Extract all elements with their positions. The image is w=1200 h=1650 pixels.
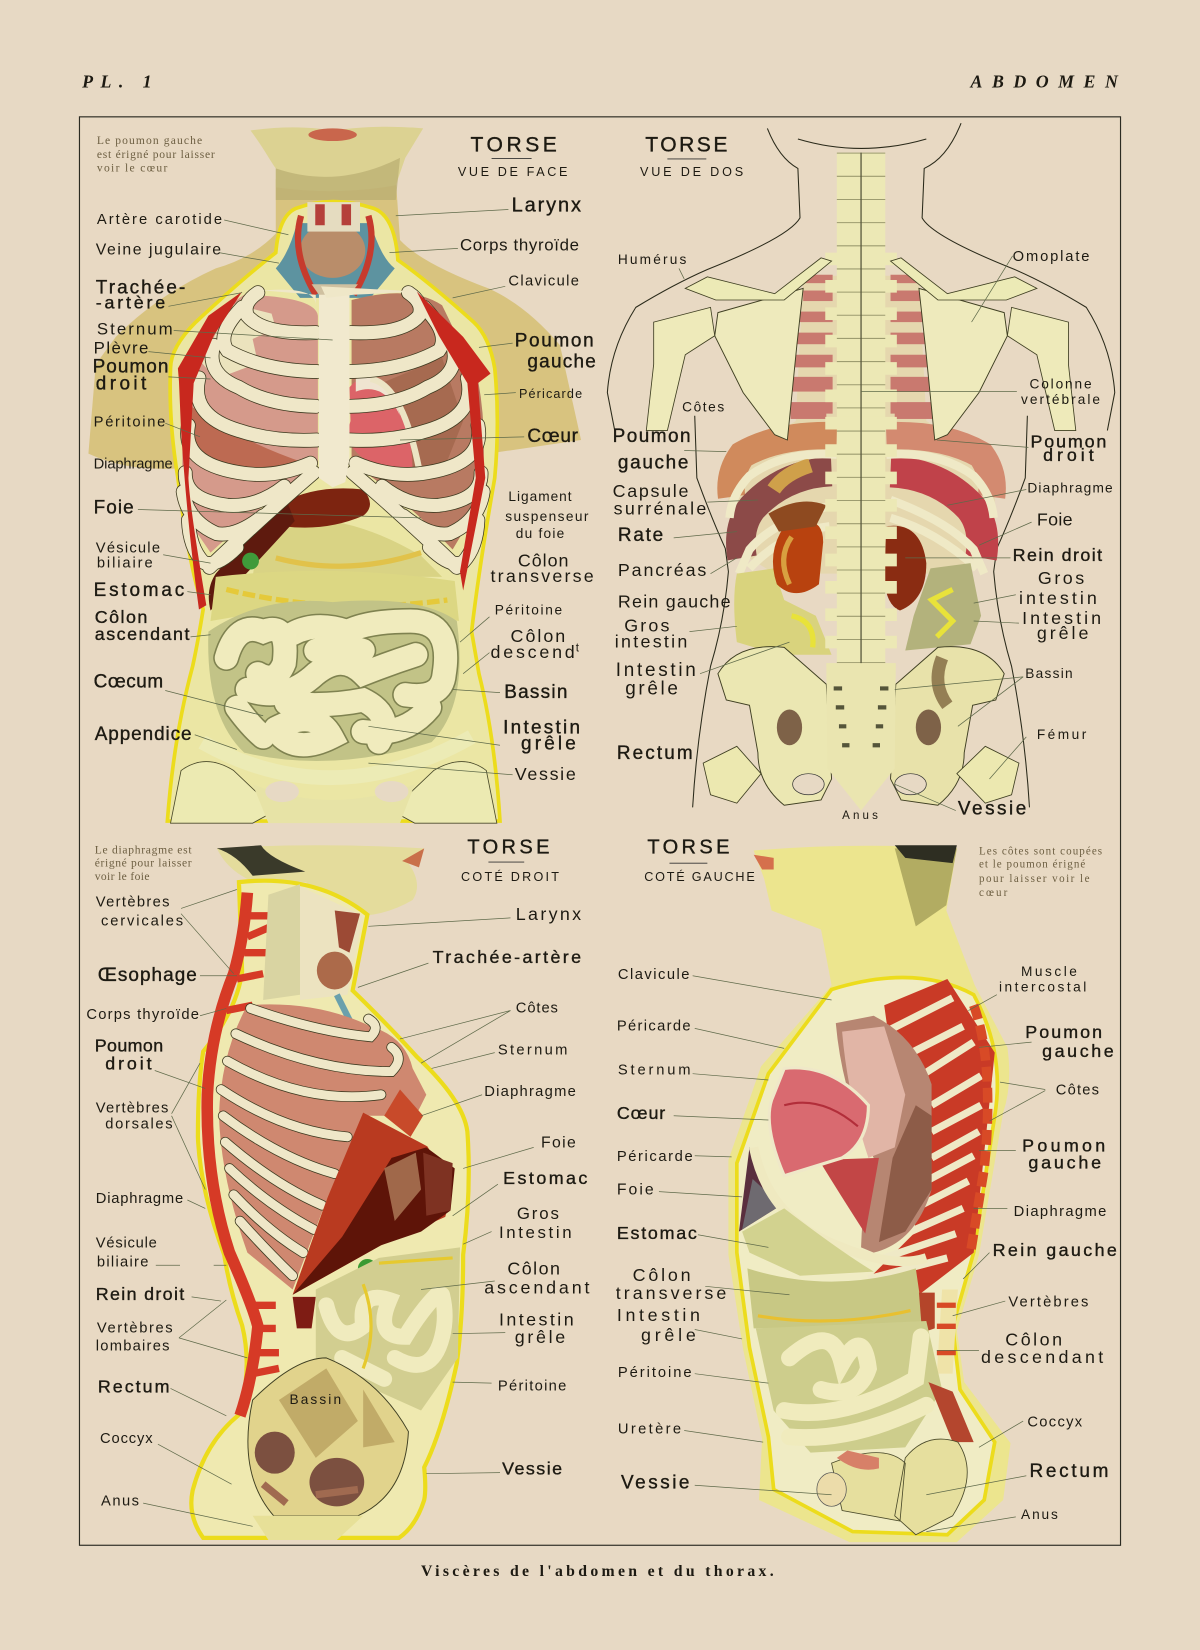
panel: torso right side: [86, 837, 590, 1540]
note: right side: [95, 844, 192, 883]
note: left side: et le poumon érigné: [979, 858, 1085, 870]
labels: right side left column: dorsales: [105, 1116, 173, 1132]
leader lines: [659, 976, 1045, 1532]
labels: left side right column: Coccyx: [1027, 1414, 1083, 1430]
labels: front right: Poumon: [515, 330, 594, 351]
caption: Viscères de l'abdomen et du thorax.: [421, 1563, 774, 1580]
heading: torse coté gauche: TORSE: [647, 837, 729, 859]
labels: back right: intestin: [1019, 588, 1097, 608]
labels: front right: t: [576, 643, 580, 655]
labels: front left: Diaphragme: [94, 456, 173, 472]
labels: front right: descend: [491, 642, 575, 662]
labels: left side left column: Uretère: [618, 1422, 681, 1438]
labels: front left: Artère carotide: [97, 212, 222, 228]
leader lines: [674, 256, 1032, 811]
labels: left side right column: Anus: [1021, 1507, 1058, 1522]
body: [191, 881, 469, 1538]
labels: back right: Gros: [1038, 568, 1084, 588]
intercostal muscles: [863, 979, 995, 1305]
labels: front right: [460, 195, 596, 784]
heading: torse coté droit: [461, 837, 559, 884]
labels: right side left column: Rein droit: [96, 1284, 184, 1304]
labels: right side left column: Vertèbres: [97, 1321, 173, 1337]
heading: torse coté gauche: [644, 837, 755, 884]
diaphragm and liver: [293, 1113, 453, 1295]
labels: back right: Poumon: [1031, 431, 1106, 451]
labels: back left: [613, 252, 1026, 822]
labels: back right: droit: [1043, 445, 1094, 465]
labels: right side left column: lombaires: [96, 1339, 169, 1355]
note: right side: voir le foie: [95, 870, 149, 883]
labels: right side right column: [433, 904, 590, 1479]
liver wedge: [739, 1147, 781, 1232]
kidneys: [773, 521, 823, 593]
heading: torse coté droit: COTÉ DROIT: [461, 869, 559, 884]
labels: right side left column: Vésicule: [96, 1235, 157, 1251]
labels: left side right column: Poumon: [1022, 1136, 1105, 1156]
heading: torse coté gauche: COTÉ GAUCHE: [644, 869, 755, 884]
torso interior: [737, 978, 997, 1535]
labels: right side right column: Intestin: [499, 1223, 572, 1242]
labels: front left: ascendant: [95, 624, 190, 644]
labels: left side right column: Rectum: [1029, 1461, 1108, 1482]
heart: [349, 378, 413, 473]
labels: left side right column: Muscle: [1021, 964, 1077, 979]
labels: front right: Côlon: [518, 550, 568, 570]
labels: front left: Côlon: [95, 607, 147, 627]
labels: front left: -artère: [96, 292, 165, 312]
labels: right side right column: Larynx: [516, 904, 581, 924]
transverse colon: [211, 571, 459, 621]
labels: left side left column: grêle: [641, 1325, 696, 1345]
note: left side: [979, 846, 1102, 899]
labels: right side left column: biliaire: [97, 1254, 148, 1270]
labels: back right: Rein droit: [1013, 545, 1102, 565]
red muscles: [178, 292, 242, 609]
labels: front left: biliaire: [97, 555, 153, 571]
page header right: ABDOMEN: [970, 71, 1119, 91]
labels: front right: Intestin: [503, 718, 580, 739]
labels: front right: gauche: [527, 351, 596, 372]
labels: left side right column: intercostal: [999, 980, 1086, 995]
labels: left side right column: Côlon: [1005, 1329, 1062, 1349]
note: right side: érigné pour laisser: [95, 856, 192, 869]
heading: torse vue de dos: VUE DE DOS: [640, 165, 743, 179]
labels: back right: Omoplate: [1013, 249, 1089, 265]
labels: right side right column: Diaphragme: [484, 1084, 576, 1100]
labels: right side right column: Péritoine: [498, 1379, 566, 1395]
labels: right side left column: Coccyx: [100, 1431, 153, 1447]
labels: left side right column: [981, 964, 1117, 1522]
labels: left side right column: gauche: [1028, 1152, 1101, 1172]
labels: front right: Cœur: [527, 426, 578, 447]
spine: [838, 153, 884, 674]
labels: right side left column: Bassin: [289, 1392, 341, 1407]
diaphragm fan: [819, 1158, 879, 1234]
labels: front right: Vessie: [515, 764, 576, 784]
labels: back right: grêle: [1037, 623, 1088, 643]
labels: right side left column: Vertèbres: [96, 894, 169, 910]
note: right side: Le diaphragme est: [95, 844, 192, 857]
labels: right side right column: Côlon: [507, 1259, 560, 1279]
illustration: right side torso: [191, 845, 469, 1540]
heading: torse vue de face: VUE DE FACE: [458, 165, 567, 179]
labels: left side left column: Cœur: [617, 1103, 665, 1123]
labels: back left: Anus: [842, 810, 878, 822]
labels: right side left column: Anus: [101, 1493, 139, 1509]
labels: front left: Trachée-: [96, 278, 185, 299]
leader lines: [143, 889, 534, 1526]
heading: torse coté droit: TORSE: [467, 837, 549, 859]
page header left: PL. 1: [81, 71, 152, 91]
omentum: [253, 519, 442, 577]
labels: left side right column: Côtes: [1056, 1083, 1099, 1099]
labels: front left: Poumon: [93, 357, 168, 378]
note: left side: Les côtes sont coupées: [979, 846, 1102, 858]
labels: back left: Rein gauche: [618, 591, 731, 611]
upper lung strips: [791, 275, 933, 419]
heart: [769, 1068, 868, 1176]
labels: front right: du foie: [516, 526, 564, 541]
labels: front right: Péritoine: [495, 603, 562, 618]
panel: torso front view: [88, 127, 596, 823]
labels: left side left column: Clavicule: [618, 967, 689, 983]
labels: right side left column: cervicales: [101, 913, 183, 929]
labels: front left: droit: [96, 373, 147, 394]
labels: front right: grêle: [521, 733, 576, 754]
heading: torse vue de face: [458, 134, 567, 179]
labels: right side right column: Foie: [541, 1134, 576, 1151]
leader lines: [138, 209, 524, 775]
labels: front left: Sternum: [97, 320, 173, 339]
labels: back right: Fémur: [1037, 727, 1087, 742]
labels: right side right column: ascendant: [484, 1278, 590, 1298]
ribs: [183, 293, 317, 567]
labels: right side right column: Vessie: [502, 1459, 562, 1479]
labels: back left: Rectum: [617, 743, 693, 764]
labels: back left: Intestin: [616, 660, 696, 681]
labels: right side right column: Gros: [517, 1204, 559, 1223]
labels: front left: Cœcum: [94, 671, 163, 692]
labels: back left: Humérus: [618, 252, 686, 267]
body silhouette: [728, 846, 1011, 1542]
labels: right side left column: Diaphragme: [96, 1191, 183, 1207]
labels: right side left column: droit: [105, 1053, 152, 1073]
neck window: [276, 223, 395, 298]
colon: [747, 1268, 924, 1328]
labels: back left: gauche: [618, 452, 688, 473]
stomach: [742, 1208, 874, 1276]
labels: front left: [93, 212, 222, 745]
labels: front left: Appendice: [95, 724, 192, 745]
labels: back right: Diaphragme: [1027, 481, 1113, 496]
labels: left side left column: Foie: [617, 1182, 654, 1199]
labels: front left: Foie: [94, 498, 134, 519]
intestines side: [316, 1247, 460, 1411]
labels: back left: Vessie: [958, 799, 1026, 820]
labels: left side left column: Péritoine: [618, 1365, 692, 1381]
labels: back left: Gros: [624, 616, 670, 636]
labels: front right: Corps thyroïde: [460, 236, 579, 255]
panel: torso back view: [607, 123, 1115, 822]
labels: back left: Côtes: [682, 400, 724, 415]
clavicles: [685, 258, 1037, 300]
labels: left side left column: [616, 967, 726, 1493]
pelvis: [718, 647, 832, 805]
labels: back right: Bassin: [1025, 666, 1073, 681]
note: front view: [97, 134, 215, 175]
panel: torso left side: [616, 837, 1117, 1542]
labels: left side right column: descendant: [981, 1347, 1103, 1367]
labels: left side left column: Péricarde: [617, 1149, 693, 1165]
labels: front right: Côlon: [511, 626, 565, 646]
lung: [836, 1016, 932, 1253]
lower lungs and diaphragm: [729, 416, 994, 574]
labels: front right: Ligament: [508, 489, 572, 504]
labels: front right: suspenseur: [505, 509, 589, 524]
plate frame: [79, 117, 1121, 1545]
illustration: front torso: [88, 127, 581, 823]
labels: left side left column: Vessie: [621, 1472, 689, 1493]
sternum: [319, 295, 349, 487]
kidney: [919, 1293, 935, 1333]
labels: left side right column: gauche: [1042, 1041, 1114, 1061]
small intestines: [208, 600, 460, 761]
labels: back left: Pancréas: [618, 560, 706, 580]
labels: back right: Intestin: [1022, 608, 1101, 628]
labels: left side left column: transverse: [616, 1283, 726, 1303]
labels: left side left column: Intestin: [617, 1305, 700, 1325]
labels: front right: Péricarde: [519, 387, 582, 401]
labels: left side left column: Sternum: [618, 1063, 691, 1079]
labels: back left: Poumon: [613, 426, 691, 447]
small intestine: [756, 1321, 942, 1453]
labels: left side left column: Estomac: [617, 1223, 697, 1243]
labels: front left: Péritoine: [94, 414, 165, 430]
scapulae: [715, 288, 803, 440]
heading: torse vue de dos: TORSE: [645, 134, 727, 157]
labels: right side right column: Sternum: [498, 1043, 567, 1059]
illustration: back torso: [607, 123, 1115, 811]
labels: right side right column: Intestin: [499, 1309, 574, 1329]
head and neck: [217, 845, 424, 916]
lung mass: [219, 1004, 426, 1289]
labels: back right: Colonne: [1029, 376, 1092, 391]
note: left side: pour laisser voir le: [979, 873, 1090, 885]
labels: right side left column: Œsophage: [98, 965, 197, 986]
labels: front right: Clavicule: [508, 273, 579, 289]
spine: [207, 893, 258, 1416]
labels: left side right column: Diaphragme: [1014, 1204, 1106, 1220]
labels: back left: intestin: [615, 631, 687, 651]
labels: back left: Rate: [618, 525, 663, 546]
labels: right side right column: Trachée-artère: [433, 947, 581, 967]
heading: torse vue de dos: [640, 134, 743, 179]
labels: left side left column: Péricarde: [617, 1019, 691, 1035]
labels: right side left column: Rectum: [98, 1377, 169, 1397]
labels: right side left column: Poumon: [95, 1036, 163, 1056]
labels: left side right column: Vertèbres: [1008, 1294, 1088, 1310]
ribs: [221, 1008, 398, 1276]
labels: front left: Plèvre: [94, 339, 148, 358]
humeri: [646, 307, 1076, 431]
illustration: left side torso: [728, 845, 1011, 1542]
labels: right side right column: Estomac: [503, 1168, 587, 1188]
heading: torse vue de face: TORSE: [471, 134, 557, 157]
labels: right side left column: Vertèbres: [96, 1101, 168, 1117]
labels: front left: Estomac: [94, 580, 184, 601]
labels: right side right column: Côtes: [516, 1001, 558, 1017]
rectum and bladder: [928, 1382, 974, 1442]
labels: right side left column: Corps thyroïde: [86, 1007, 199, 1023]
note: front view: Le poumon gauche: [97, 134, 202, 147]
labels: back right: vertébrale: [1021, 392, 1100, 407]
labels: left side left column: Côlon: [633, 1265, 691, 1285]
labels: front right: Bassin: [504, 682, 567, 703]
note: front view: est érigné pour laisser: [97, 148, 215, 161]
ribcage base: [726, 276, 995, 574]
pelvis: [248, 1358, 408, 1516]
labels: front left: Vésicule: [96, 541, 160, 557]
labels: left side right column: Poumon: [1025, 1022, 1102, 1042]
labels: back right: [1013, 249, 1113, 742]
hips: [171, 762, 497, 823]
labels: front right: transverse: [491, 566, 594, 586]
labels: right side right column: grêle: [515, 1327, 565, 1347]
note: front view: voir le cœur: [97, 162, 168, 175]
lungs: [182, 295, 318, 553]
labels: back right: Foie: [1037, 509, 1073, 529]
labels: back left: surrénale: [614, 499, 706, 519]
intestines back: [734, 568, 832, 655]
note: left side: cœur: [979, 887, 1008, 899]
labels: left side right column: Rein gauche: [993, 1240, 1117, 1260]
labels: right side left column: [86, 894, 341, 1509]
liver: [279, 488, 370, 528]
labels: front left: Veine jugulaire: [96, 242, 221, 259]
labels: front right: Larynx: [512, 195, 581, 217]
labels: back left: Capsule: [613, 481, 688, 501]
labels: back left: grêle: [625, 679, 678, 700]
